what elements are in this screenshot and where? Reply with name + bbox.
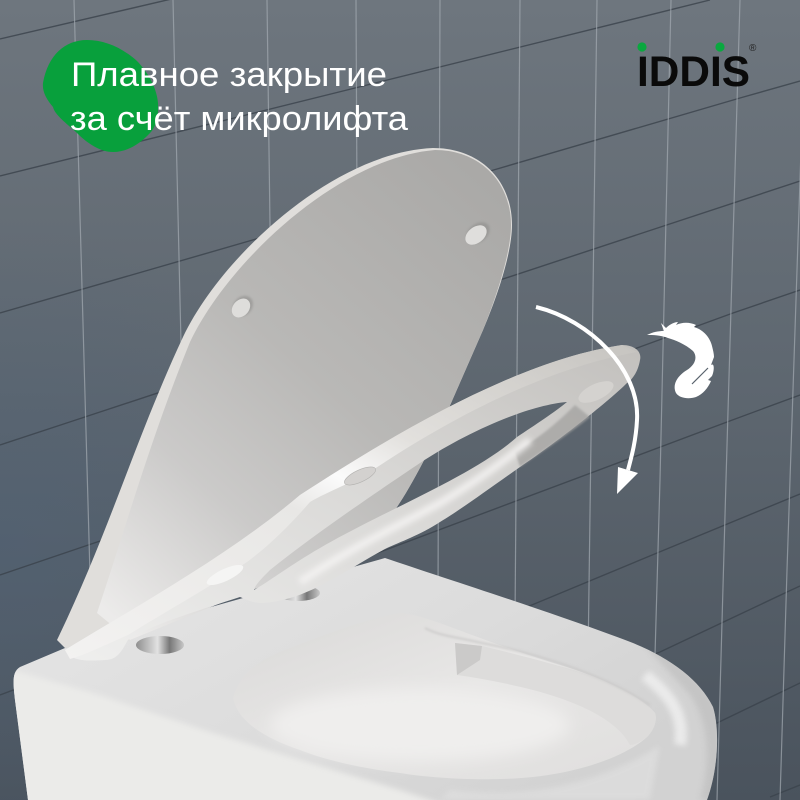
raised lid xyxy=(57,148,512,648)
title line 1: Плавное закрытие xyxy=(71,56,387,94)
right hinge xyxy=(276,585,320,601)
lid inner face xyxy=(97,150,511,640)
seat lower fin shade xyxy=(515,405,590,467)
bowl opening xyxy=(233,613,656,779)
logo dot 1 xyxy=(637,42,647,52)
right rim darkening xyxy=(650,651,717,800)
ledge notch xyxy=(455,643,482,675)
left hinge xyxy=(136,636,184,654)
lid bump left xyxy=(228,292,257,321)
title line 2: за счёт микролифта xyxy=(70,100,408,138)
inner rim ledge xyxy=(455,643,656,745)
arrow head xyxy=(617,467,638,494)
feather shape xyxy=(647,322,714,398)
seat buffer left xyxy=(204,561,246,589)
rim inner shading xyxy=(425,628,650,705)
right rim gloss xyxy=(645,675,681,745)
lid edge xyxy=(57,148,512,648)
bowl front face xyxy=(5,668,460,800)
logo dot 2 xyxy=(715,42,725,52)
chrome hinges xyxy=(136,585,320,654)
bowl interior highlight xyxy=(270,689,570,761)
green blob xyxy=(43,40,158,152)
bottom rim shade xyxy=(522,753,655,797)
seat body with opening xyxy=(65,345,640,661)
feather slit xyxy=(692,368,708,384)
title xyxy=(70,56,408,138)
curved arrow xyxy=(536,307,638,494)
bowl body xyxy=(14,558,717,800)
seat lower ring highlight xyxy=(300,440,530,582)
lid bump right xyxy=(462,218,494,249)
registered mark: ® xyxy=(749,43,757,54)
feather icon xyxy=(647,322,714,398)
seat buffer right xyxy=(575,377,617,407)
arrow arc xyxy=(536,307,637,470)
seat buffer centre xyxy=(342,463,378,489)
logo wordmark: IDDIS xyxy=(637,48,750,96)
raised seat xyxy=(65,345,640,661)
IDDIS logo xyxy=(637,42,757,96)
seat top rim strip xyxy=(65,345,637,659)
toilet bowl xyxy=(5,558,720,800)
